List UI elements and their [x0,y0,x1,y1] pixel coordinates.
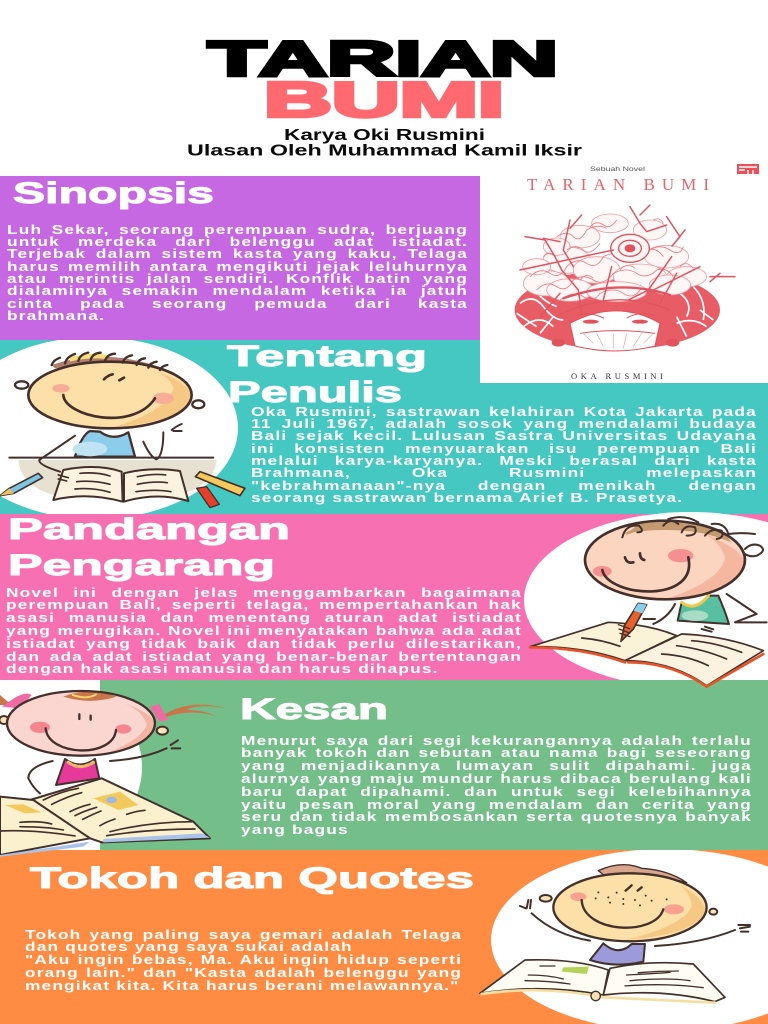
illustration: child studying at desk [0,353,245,508]
text: sinopsis: harus memilih antara mengikuti jejak leluhurnya [7,259,468,274]
text: tokoh dan quotes: "Aku ingin bebas, Ma. Aku ingin hidup seperti [25,952,462,967]
text: pandangan pengarang: perempuan Bali, seperti telaga, mempertahankan hak [6,597,522,612]
text: sinopsis: atau merintis jalan sendiri. Konflik batin yang [7,271,468,286]
subtitle: author: Karya Oki Rusmini [284,127,485,144]
text: tentang penulis: "kebrahmanaan"-nya dengan menikah dengan [251,478,757,493]
book cover [480,160,768,383]
text: tentang penulis: Brahmana, Oka Rusmini melepaskan [251,465,757,480]
cover illustration [515,205,735,351]
heading: sinopsis: Sinopsis [13,177,214,210]
text: pandangan pengarang: istiadat yang tidak baik dan tidak perlu dilestarikan, [6,636,522,651]
text: sinopsis: Terjebak dalam sistem kasta yang kaku, Telaga [7,246,468,261]
text: pandangan pengarang: dan ada adat istiadat yang benar-benar bertentangan [6,648,522,664]
heading: tentang: Tentang [227,340,427,373]
heading: penulis: Penulis [228,376,402,409]
text: tentang penulis: 11 Juli 1967, adalah sosok yang mendalami budaya [251,416,757,431]
illustration: child writing in book [530,517,767,687]
text: tentang penulis: seorang sastrawan bernama Arief B. Prasetya. [251,490,683,505]
heading: tokoh dan quotes: Tokoh dan Quotes [30,862,474,895]
text: sinopsis [7,222,468,323]
text: kesan: yang bagus [241,822,349,837]
text: tokoh dan quotes: mengikat kita. Kita harus berani melawannya." [25,978,460,993]
text: pandangan pengarang: yang merugikan. Novel ini menyatakan bahwa ada adat [6,623,522,638]
cover branches [520,205,735,317]
title [208,32,558,128]
panel: tentang penulis [0,337,768,519]
text: tokoh dan quotes: orang lain." dan "Kasta adalah belenggu yang [25,965,462,980]
text: sinopsis: brahmana. [7,308,105,323]
illustration: girl with open book [0,691,227,857]
text: kesan: alurnya yang maju mundur harus dibaca berulang kali [241,771,752,786]
text: kesan: seru dan tidak membosankan serta quotesnya banyak [241,809,752,824]
text: tentang penulis: Bali sejak kecil. Lulusan Sastra Universitas Udayana [251,428,757,443]
subtitle: reviewer: Ulasan Oleh Muhammad Kamil Iksir [187,142,582,160]
text: kesan: banyak tokoh dan sebutan atau nama bagi seseorang [241,745,752,760]
text: sinopsis: cinta pada seorang pemuda dari kasta [7,296,468,311]
text: pandangan pengarang: asasi manusia dan menentang aturan adat istiadat [6,610,522,625]
cover title: TARIAN BUMI [527,175,709,194]
panel: pandangan pengarang [0,512,768,688]
text: tentang penulis: Oka Rusmini, sastrawan kelahiran Kota Jakarta pada [251,404,757,419]
cover author: OKA RUSMINI [571,371,663,381]
text: tokoh dan quotes: Tokoh yang paling saya gemari adalah Telaga [25,927,462,942]
text: tokoh dan quotes: dan quotes yang saya sukai adalah [25,939,353,954]
heading: kesan: Kesan [240,693,388,726]
panel: sinopsis [0,176,480,340]
text: tentang penulis [251,404,757,505]
cover lace texture [530,219,693,300]
text: pandangan pengarang [6,585,522,676]
text: tentang penulis: melalui karya-karyanya. Meski berasal dari kasta [251,453,757,468]
text: kesan: baru dapat dipahami. dan untuk segi kelebihannya [241,784,752,799]
cover publisher logo [737,164,759,174]
heading: pandangan: Pandangan [8,513,290,546]
text: kesan: yaitu pesan moral yang mendalam dan cerita yang [241,797,752,812]
panel: kesan [100,680,768,850]
title line: tarian: TARIAN [208,32,558,86]
text: kesan [241,733,752,837]
cover small text: Sebuah Novel [590,166,646,173]
subtitle [187,127,582,160]
text: kesan: yang menjadikannya lumayan sulit dipahami. juga [241,758,752,773]
text: kesan: Menurut saya dari segi kekurangannya adalah terlalu [241,733,752,748]
heading: pengarang: Pengarang [8,549,275,582]
title line: bumi: BUMI [264,74,504,128]
text: tokoh dan quotes [25,927,462,993]
text: tentang penulis: ini konsisten menyuarakan isu perempuan Bali [251,441,757,456]
text: pandangan pengarang: Novel ini dengan jelas menggambarkan bagaimana [6,585,522,600]
text: sinopsis: dialaminya semakin mendalam ketika ia jatuh [7,283,468,298]
text: sinopsis: Luh Sekar, seorang perempuan sudra, berjuang [7,222,468,237]
cover rose [611,234,649,262]
text: sinopsis: untuk merdeka dari belenggu adat istiadat. [7,234,468,249]
section headings [8,177,474,895]
cover face [570,311,660,351]
illustration: cheerful child with book [480,865,750,1003]
panel: tokoh dan quotes [0,849,768,1024]
text: pandangan pengarang: dengan hak asasi manusia dan harus dihapus. [6,661,439,676]
